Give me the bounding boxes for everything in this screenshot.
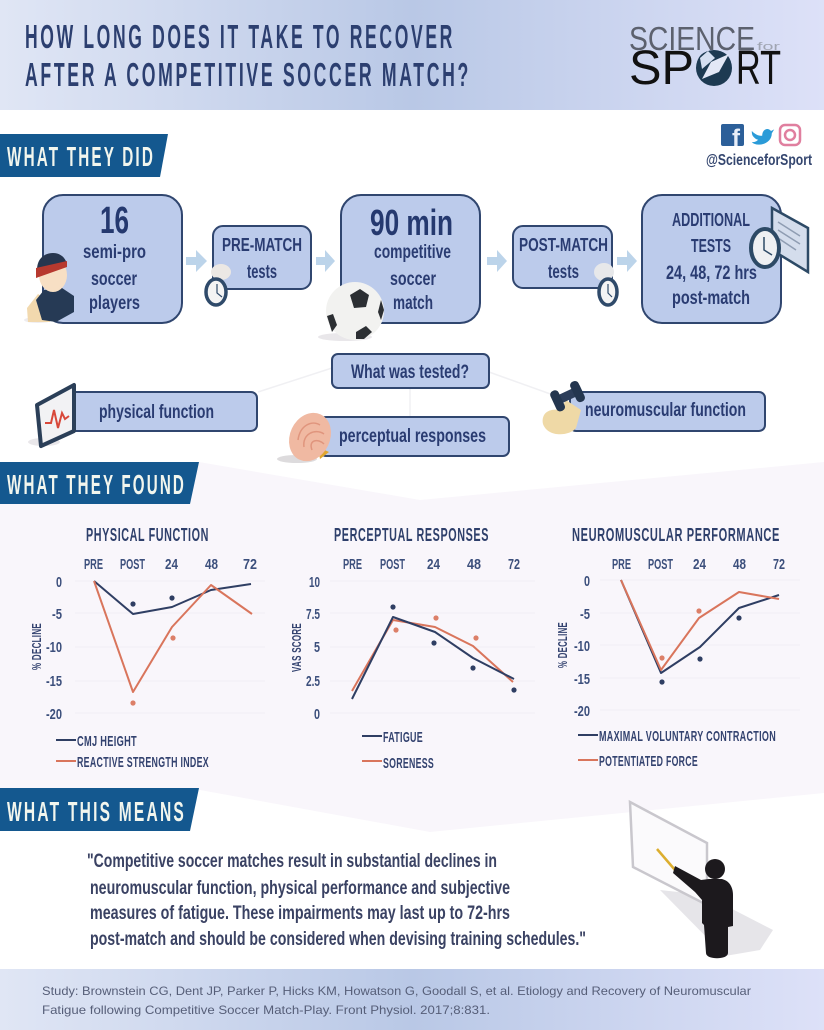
panel: physical function (66, 392, 257, 431)
x axis labels: 48 (467, 556, 481, 573)
panel: 90 min competitive soccer match (341, 195, 480, 323)
legend: SORENESS (383, 755, 434, 772)
chart: physical function (29, 525, 265, 771)
x axis labels: POST (648, 556, 673, 573)
panel: 90 min competitive soccer match: competitive (374, 242, 451, 263)
quote text: measures of fatigue. These impairments may last up to 72-hrs (90, 903, 510, 924)
y axis labels (306, 574, 320, 723)
panel: 16 semi-pro soccer players: soccer (91, 269, 137, 290)
y axis labels: -5 (580, 606, 590, 623)
icon: tablet with heartbeat (28, 385, 74, 446)
logo: Science for Sport: SP (629, 42, 694, 95)
y axis title: VAS SCORE (289, 623, 304, 672)
x axis labels: 24 (165, 556, 179, 573)
x axis labels: 24 (693, 556, 707, 573)
icon: clipboard and clock (751, 208, 808, 272)
connector lines (258, 368, 556, 417)
banner: what they found: WHAT THEY FOUND (7, 469, 186, 500)
panel: 16 semi-pro soccer players (43, 195, 182, 323)
panel: 16 semi-pro soccer players: players (89, 293, 140, 314)
logo: Science for Sport: for (757, 41, 781, 53)
panel: additional tests: post-match (672, 288, 750, 309)
icon: instagram (780, 125, 800, 145)
y axis labels (46, 574, 62, 723)
panel: 16 semi-pro soccer players: semi-pro (83, 242, 146, 263)
series: fatigue (352, 617, 514, 699)
significance markers (130, 595, 176, 706)
header band (0, 0, 824, 110)
section background: what they found (0, 462, 824, 832)
legend (578, 728, 776, 770)
quote text: neuromuscular function, physical performance and subjective (90, 878, 510, 899)
y axis labels: 10 (309, 574, 320, 591)
panel: additional tests (642, 195, 781, 323)
x axis labels: 72 (773, 556, 785, 573)
series: reactive strength index (94, 581, 252, 692)
icon: arm with dumbbell (543, 380, 586, 434)
icon: soccer ball (318, 282, 384, 341)
x axis labels: POST (380, 556, 405, 573)
chart: perceptual responses (289, 525, 535, 772)
series: maximal voluntary contraction (621, 580, 779, 673)
y axis labels: -5 (52, 606, 62, 623)
x axis labels: POST (120, 556, 145, 573)
chart title: PHYSICAL FUNCTION (86, 525, 209, 545)
logo: Science for Sport: O (694, 42, 734, 95)
chart title: PERCEPTUAL RESPONSES (334, 525, 489, 545)
series: CMJ height (94, 581, 251, 614)
citation (42, 984, 751, 1017)
x axis labels: PRE (612, 556, 631, 573)
legend: REACTIVE STRENGTH INDEX (77, 754, 209, 771)
panel: additional tests: 24, 48, 72 hrs (666, 263, 757, 284)
banner: what they found (0, 462, 199, 504)
y axis labels: -10 (574, 638, 590, 655)
x axis labels: 72 (243, 556, 257, 573)
y axis labels: 2.5 (306, 673, 320, 690)
icon: soccer player (24, 253, 74, 323)
y axis title: % DECLINE (555, 622, 570, 668)
panel: pre-match tests: PRE-MATCH (222, 235, 302, 255)
legend: POTENTIATED FORCE (599, 753, 698, 770)
y axis labels: -15 (46, 673, 62, 690)
logo: Science for Sport: SCIENCE (629, 20, 755, 57)
legend: CMJ HEIGHT (77, 733, 137, 750)
panel: physical function: physical function (99, 402, 214, 423)
banner: what this means: WHAT THIS MEANS (7, 796, 186, 827)
icon: post-match stopwatch (594, 263, 617, 305)
footer band (0, 969, 824, 1030)
y axis labels: -20 (574, 703, 590, 720)
series: soreness (352, 620, 513, 691)
panel: pre-match tests (213, 226, 311, 289)
banner: what they did: WHAT THEY DID (7, 141, 155, 172)
x axis labels: PRE (343, 556, 362, 573)
panel: post-match tests (513, 226, 612, 288)
y axis labels: 0 (584, 573, 590, 590)
banner: what they did (0, 134, 168, 177)
icon: brain (277, 406, 339, 468)
panel: what was tested: What was tested? (351, 362, 469, 383)
y axis labels: 0 (314, 706, 320, 723)
citation: Study: Brownstein CG, Dent JP, Parker P, Hicks KM, Howatson G, Goodall S, et al. Etiology and Recovery of Neuromuscular (42, 984, 751, 998)
panel: what was tested (332, 354, 489, 388)
panel: neuromuscular function (570, 392, 765, 431)
panel: perceptual responses (320, 417, 509, 456)
panel: post-match tests: POST-MATCH (519, 235, 608, 255)
legend: FATIGUE (383, 729, 423, 746)
logo: Science for Sport (629, 20, 781, 95)
panel: additional tests: TESTS (691, 236, 731, 256)
panel: neuromuscular function: neuromuscular function (585, 400, 746, 421)
x axis labels (84, 556, 257, 573)
y axis labels: 0 (56, 574, 62, 591)
y axis labels: -10 (46, 639, 62, 656)
x axis labels: 48 (205, 556, 218, 573)
panel: additional tests: ADDITIONAL (672, 210, 750, 230)
flow arrows (186, 250, 637, 272)
panel: post-match tests: tests (548, 262, 579, 283)
y axis labels: -20 (46, 706, 62, 723)
y axis labels (574, 573, 590, 720)
panel: perceptual responses: perceptual responses (339, 426, 486, 447)
banner: what this means (0, 788, 199, 831)
panel: 90 min competitive soccer match: match (393, 293, 433, 314)
icon: pre-match stopwatch (206, 264, 231, 305)
series: potentiated force (621, 580, 779, 670)
x axis labels: 48 (733, 556, 746, 573)
y axis labels: 7.5 (306, 606, 320, 623)
legend (56, 733, 209, 771)
icon: presenter at board (630, 802, 773, 958)
x axis labels (612, 556, 785, 573)
panel: pre-match tests: tests (247, 262, 277, 283)
panel: 90 min competitive soccer match: soccer (390, 269, 436, 290)
title: HOW LONG DOES IT TAKE TO RECOVER (25, 18, 455, 55)
icon: facebook: f (732, 125, 741, 152)
title (25, 18, 471, 93)
quote text: "Competitive soccer matches result in substantial declines in (87, 851, 497, 872)
chart: neuromuscular performance (555, 525, 800, 770)
y axis labels: -15 (574, 671, 590, 688)
logo: Science for Sport: RT (736, 42, 781, 95)
panel: 90 min competitive soccer match: 90 min (370, 202, 453, 243)
social icons (706, 124, 813, 169)
citation: Fatigue following Competitive Soccer Match-Play. Front Physiol. 2017;8:831. (42, 1003, 490, 1017)
x axis labels: PRE (84, 556, 103, 573)
significance markers (659, 608, 742, 685)
panel: 16 semi-pro soccer players: 16 (100, 200, 129, 242)
quote text: post-match and should be considered when devising training schedules." (90, 929, 586, 950)
legend (362, 729, 434, 772)
x axis labels: 72 (508, 556, 520, 573)
x axis labels: 24 (427, 556, 441, 573)
x axis labels (343, 556, 520, 573)
icon: twitter (752, 129, 774, 145)
significance markers (390, 604, 517, 693)
quote text (87, 851, 586, 950)
y axis labels: 5 (314, 639, 320, 656)
y axis title: % DECLINE (29, 623, 44, 670)
